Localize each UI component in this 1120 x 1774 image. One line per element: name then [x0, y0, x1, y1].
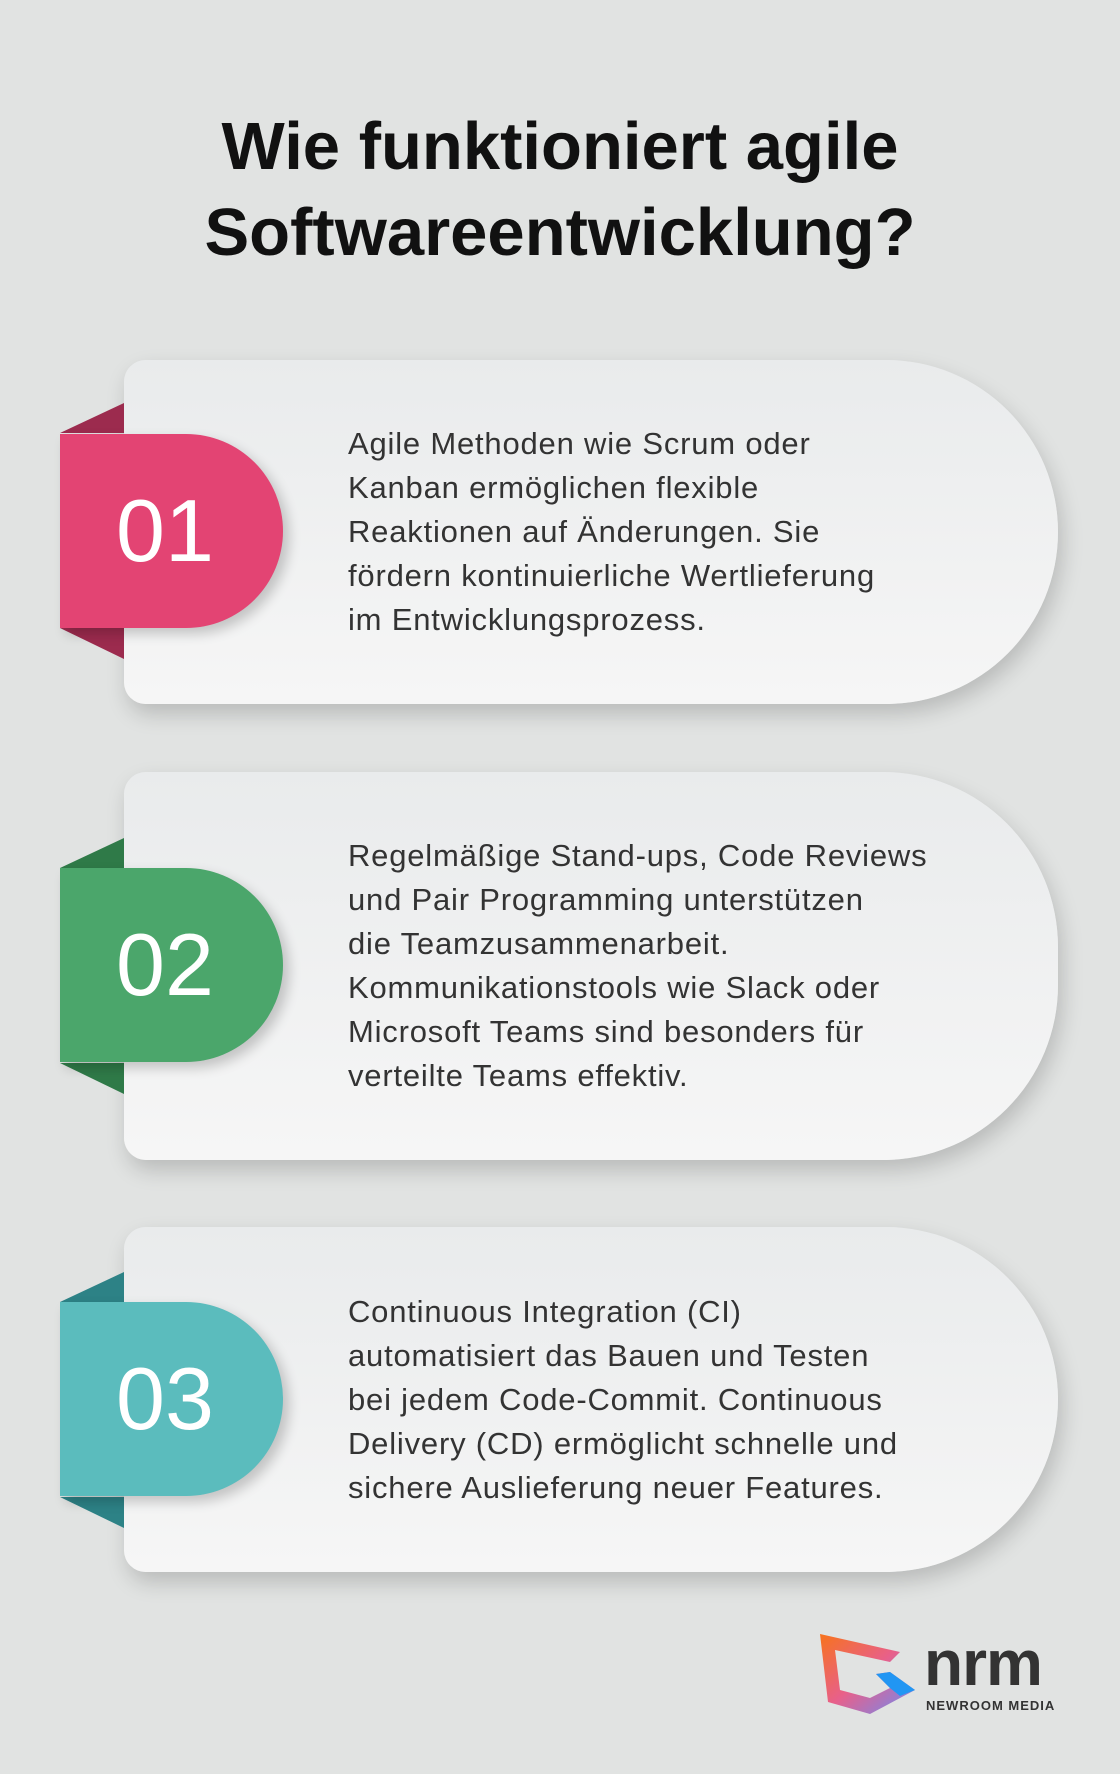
text 1: Agile Methoden wie Scrum oder: [348, 426, 811, 461]
badge 02: [60, 868, 283, 1062]
logo: [820, 1627, 1055, 1714]
text 1: [348, 426, 875, 637]
text 2: [348, 838, 927, 1093]
text 3: [348, 1294, 898, 1505]
badge 01: 01: [116, 481, 214, 580]
logo text: nrm: [924, 1627, 1042, 1699]
card 1: [124, 360, 1058, 704]
text 1: im Entwicklungsprozess.: [348, 602, 706, 637]
card 2: [124, 772, 1058, 1160]
logo: NEWROOM MEDIA: [926, 1698, 1055, 1713]
text 2: Kommunikationstools wie Slack oder: [348, 970, 880, 1005]
title: [204, 109, 916, 270]
text 2: verteilte Teams effektiv.: [348, 1058, 688, 1093]
card 3: [124, 1227, 1058, 1572]
text 3: sichere Auslieferung neuer Features.: [348, 1470, 883, 1505]
text 3: Delivery (CD) ermöglicht schnelle und: [348, 1426, 898, 1461]
fold 2: [60, 838, 124, 1094]
logo icon: [820, 1634, 915, 1714]
text 2: Regelmäßige Stand-ups, Code Reviews: [348, 838, 927, 873]
text 1: Kanban ermöglichen flexible: [348, 470, 759, 505]
text 2: und Pair Programming unterstützen: [348, 882, 864, 917]
text 2: Microsoft Teams sind besonders für: [348, 1014, 864, 1049]
text 2: die Teamzusammenarbeit.: [348, 926, 729, 961]
badge 02: 02: [116, 915, 214, 1014]
title: Wie funktioniert agile: [222, 109, 898, 184]
text 3: automatisiert das Bauen und Testen: [348, 1338, 869, 1373]
text 3: bei jedem Code-Commit. Continuous: [348, 1382, 883, 1417]
badge 03: [60, 1302, 283, 1496]
fold 3: [60, 1272, 124, 1528]
text 3: Continuous Integration (CI): [348, 1294, 742, 1329]
badge 03: 03: [116, 1349, 214, 1448]
fold 1: [60, 403, 124, 659]
title: Softwareentwicklung?: [204, 195, 916, 270]
text 1: fördern kontinuierliche Wertlieferung: [348, 558, 875, 593]
badge 01: [60, 434, 283, 628]
text 1: Reaktionen auf Änderungen. Sie: [348, 514, 820, 549]
